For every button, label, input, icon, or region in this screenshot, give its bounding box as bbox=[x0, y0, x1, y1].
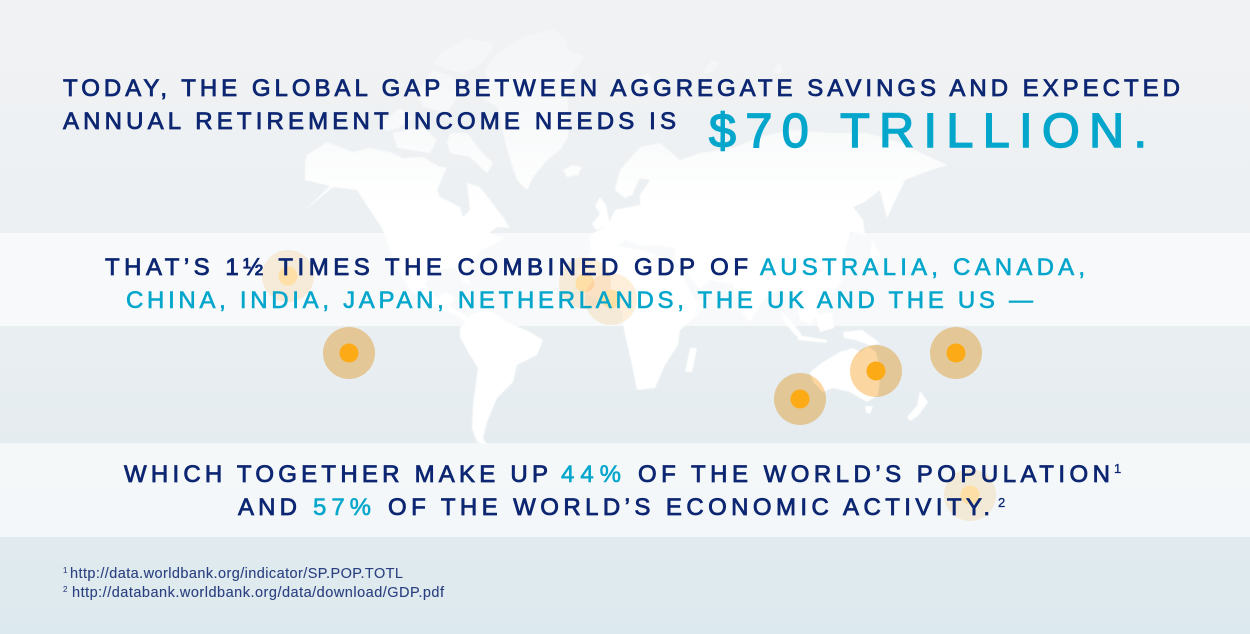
comparison line 1 dark: THAT’S 1½ TIMES THE COMBINED GDP OF bbox=[105, 254, 748, 281]
comparison line 1 countries: AUSTRALIA, CANADA, bbox=[760, 254, 1085, 281]
marker: Atlantic bbox=[559, 257, 611, 309]
comparison line 2 countries: CHINA, INDIA, JAPAN, NETHERLANDS, THE UK AND THE US — bbox=[126, 287, 1033, 314]
world map bbox=[305, 29, 947, 445]
population line end: OF THE WORLD’S POPULATION bbox=[638, 461, 1110, 488]
big number: $70 TRILLION. bbox=[709, 104, 1147, 158]
footnote 1: http://data.worldbank.org/indicator/SP.POP.TOTL bbox=[70, 566, 403, 582]
map: Africa bbox=[577, 245, 710, 390]
location markers bbox=[262, 250, 996, 521]
map: Australia bbox=[810, 346, 881, 402]
footnote 2: 2 bbox=[63, 585, 68, 594]
map: Southeast Asia islands bbox=[780, 310, 880, 346]
marker: Pacific bbox=[323, 327, 375, 379]
headline bbox=[63, 75, 1180, 158]
map: Japan bbox=[862, 240, 880, 275]
map: Arctic Russia islands bbox=[637, 60, 783, 90]
map: Tasmania bbox=[865, 406, 873, 414]
band: upper translucent strip bbox=[0, 233, 1250, 326]
marker: Indian Ocean bbox=[774, 373, 826, 425]
headline line 2: ANNUAL RETIREMENT INCOME NEEDS IS bbox=[63, 108, 676, 135]
marker: West Africa bbox=[585, 273, 637, 325]
headline line 1: TODAY, THE GLOBAL GAP BETWEEN AGGREGATE SAVINGS AND EXPECTED bbox=[63, 75, 1180, 102]
map: North America bbox=[305, 142, 510, 323]
marker: lower right bbox=[944, 469, 996, 521]
economic line start: AND bbox=[238, 494, 297, 521]
band: lower translucent strip bbox=[0, 443, 1250, 537]
map: South America bbox=[460, 310, 543, 445]
map: New Zealand bbox=[907, 391, 928, 421]
stat 44 percent: 44% bbox=[561, 461, 621, 488]
map: Greenland bbox=[480, 29, 585, 190]
economic line end: OF THE WORLD’S ECONOMIC ACTIVITY. bbox=[388, 494, 990, 521]
stat 57 percent: 57% bbox=[313, 494, 371, 521]
superscript 1: 1 bbox=[1114, 461, 1121, 476]
map: Eurasia bbox=[590, 130, 947, 325]
population statement bbox=[124, 461, 1121, 521]
marker: Australia bbox=[850, 345, 902, 397]
marker: South Pacific bbox=[930, 327, 982, 379]
footnote 2: http://databank.worldbank.org/data/download/GDP.pdf bbox=[72, 585, 445, 601]
population line start: WHICH TOGETHER MAKE UP bbox=[124, 461, 548, 488]
map: Arctic Canada islands bbox=[382, 38, 493, 173]
map: Madagascar bbox=[685, 348, 697, 372]
footnote 1: 1 bbox=[63, 566, 68, 575]
footnotes bbox=[63, 566, 445, 601]
marker: North America west bbox=[262, 250, 314, 302]
comparison statement bbox=[105, 254, 1085, 314]
map: Iceland bbox=[563, 165, 582, 177]
map: British Isles bbox=[592, 197, 610, 230]
superscript 2: 2 bbox=[998, 495, 1005, 510]
